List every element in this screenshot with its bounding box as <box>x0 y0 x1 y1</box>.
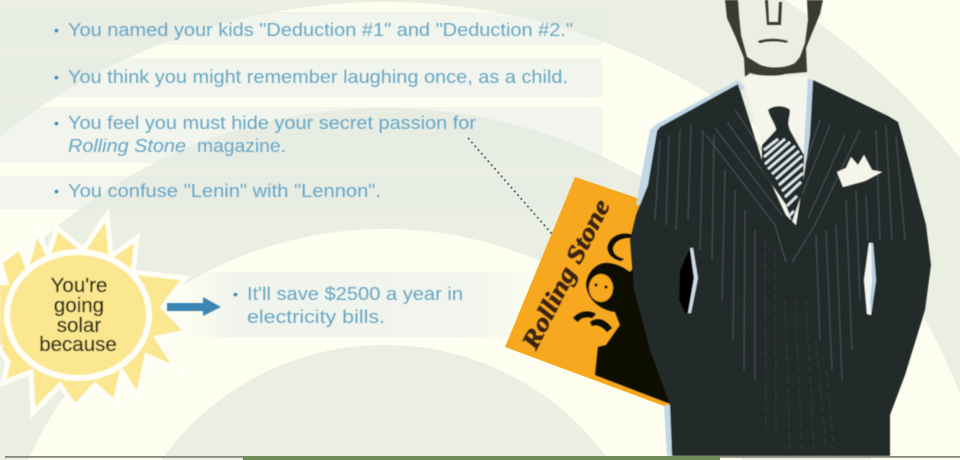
bullet four: You confuse "Lenin" with "Lennon". <box>68 180 381 201</box>
bullet two: • <box>54 69 59 85</box>
pocket square <box>837 155 882 187</box>
bullet one: • <box>54 22 59 38</box>
strip behind solar reason <box>185 272 535 337</box>
sun disc <box>7 252 149 378</box>
sun rays <box>0 215 187 413</box>
Rolling Stone magazine <box>505 177 672 409</box>
sun label <box>39 274 117 356</box>
pinstripes <box>655 110 905 380</box>
list of signs <box>54 19 573 201</box>
solar reason text: electricity bills. <box>247 306 385 327</box>
bottom rule <box>5 456 960 460</box>
sun <box>0 215 187 413</box>
suit body <box>630 80 931 456</box>
nose <box>765 0 782 25</box>
bullet four: • <box>54 183 59 199</box>
mouth <box>758 39 788 43</box>
solar reason text: It'll save $2500 a year in <box>247 283 463 304</box>
magazine title: Rolling Stone <box>517 195 616 355</box>
text strips behind the list <box>0 12 602 209</box>
magazine cover <box>505 177 672 409</box>
bullet three: Rolling Stone <box>68 135 186 156</box>
right pocket slit <box>864 243 876 315</box>
bullet two: You think you might remember laughing once, as a child. <box>68 66 568 87</box>
left edge of rays <box>0 285 12 345</box>
bullet three: magazine. <box>197 135 286 156</box>
solar reason text: • <box>233 286 238 302</box>
sun label: going <box>54 294 104 317</box>
bullet three: You feel you must hide your secret passion for <box>68 112 476 133</box>
bullet three: • <box>54 115 59 131</box>
tie <box>762 106 804 222</box>
sun label: solar <box>57 314 101 337</box>
green bottom bar <box>243 456 720 460</box>
solar reason text <box>233 283 463 327</box>
left pocket slit <box>679 248 698 313</box>
arrow <box>167 297 221 316</box>
pale blue shadow of suit <box>636 80 745 456</box>
man in pinstripe suit <box>630 0 931 456</box>
sun label: because <box>39 333 117 356</box>
bullet one: You named your kids "Deduction #1" and "Deduction #2." <box>68 19 573 40</box>
sun label: You're <box>51 274 107 297</box>
dotted leader line to magazine <box>468 138 552 234</box>
bullet three <box>54 112 476 156</box>
magazine figures <box>573 234 672 403</box>
face outline and hair <box>725 0 823 77</box>
faint lower stripes <box>765 240 834 450</box>
neck and shirt <box>742 76 813 225</box>
shirt shadow <box>803 78 813 170</box>
